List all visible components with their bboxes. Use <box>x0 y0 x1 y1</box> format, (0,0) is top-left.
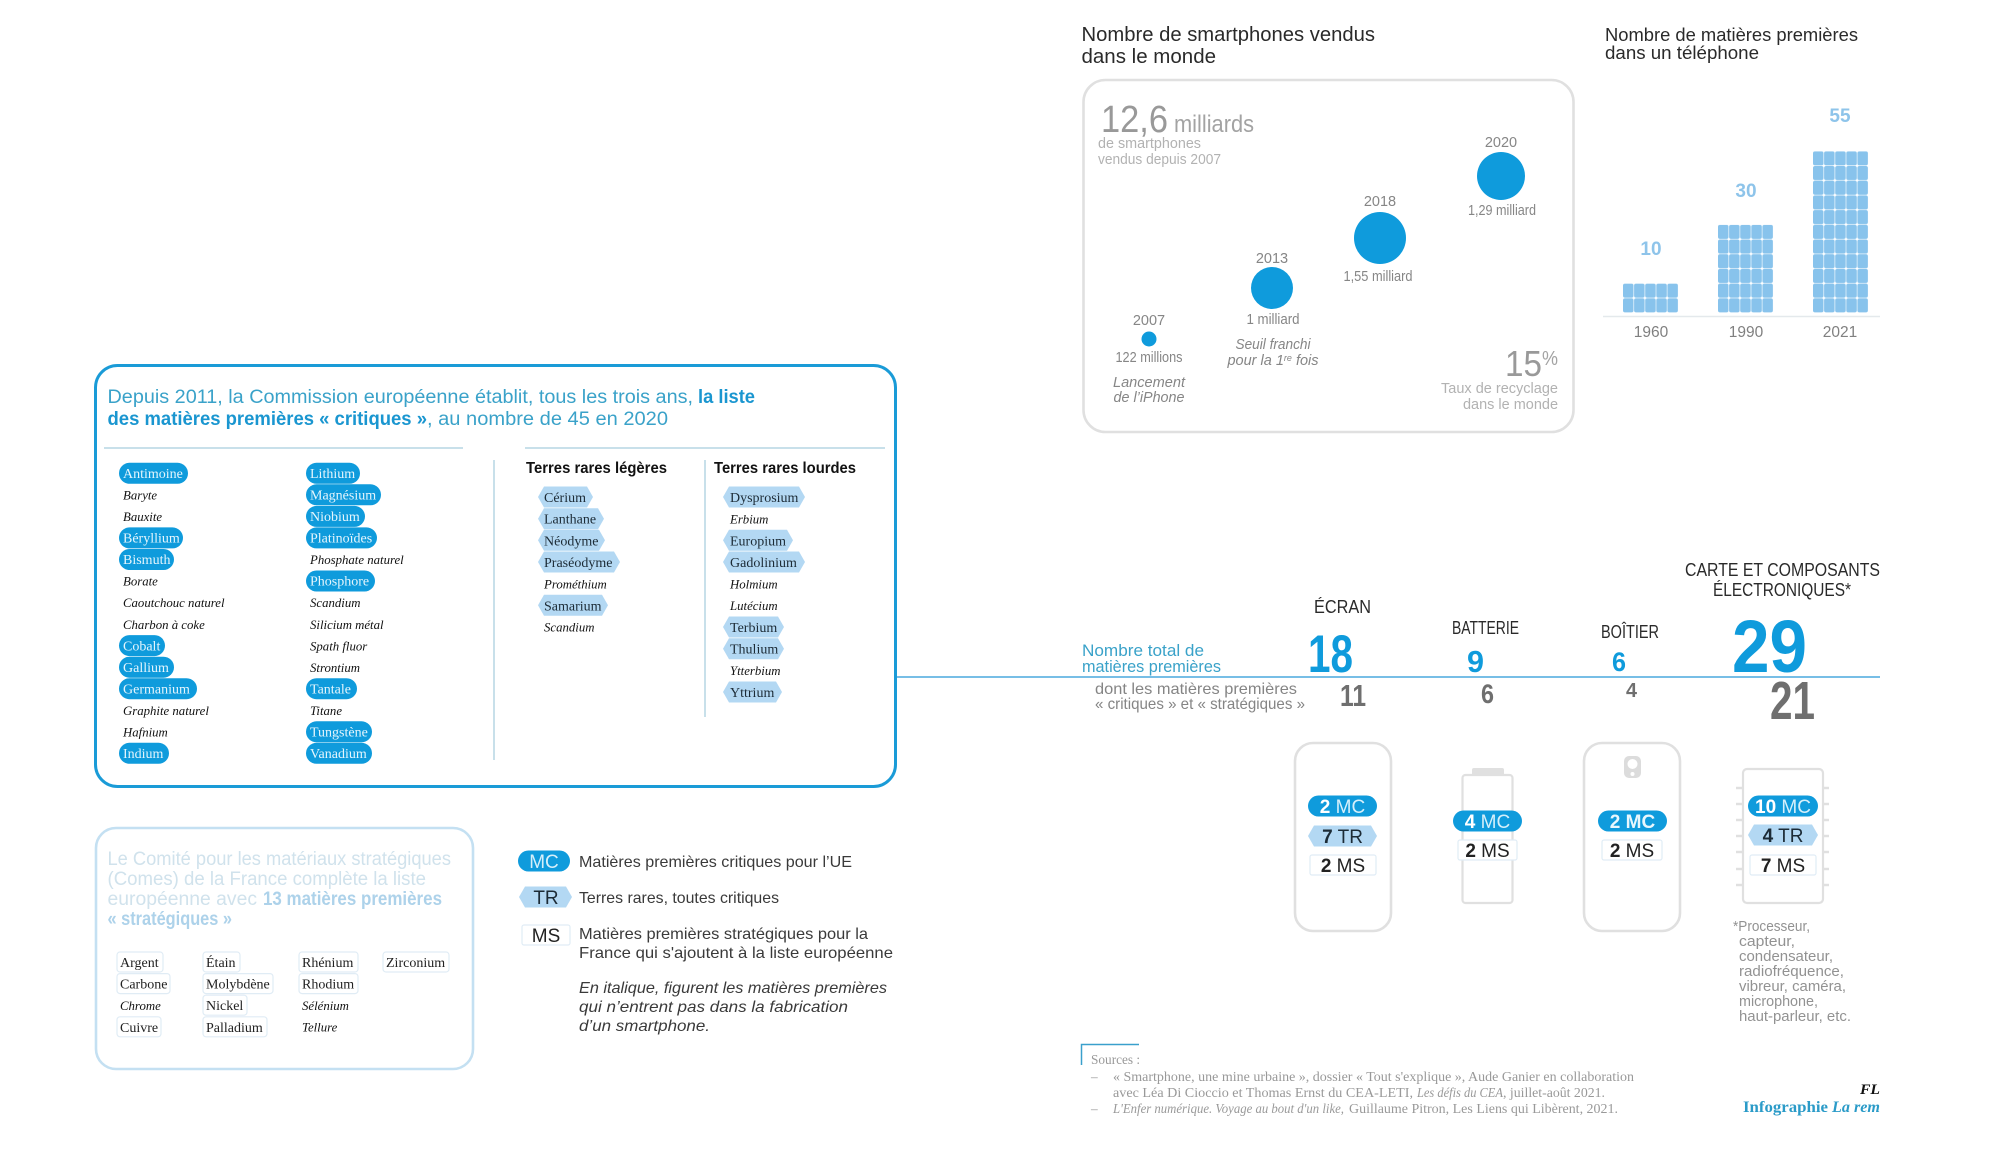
list: matières critiques, colonne 2: Scandium <box>310 596 360 610</box>
list: matières critiques, colonne 2: Silicium métal <box>310 618 384 632</box>
icon: dos de téléphone: 2 MS <box>1610 841 1654 862</box>
bubble: 2013: pour la 1 <box>1227 353 1284 369</box>
row label: dont critiques et stratégiques: dont les matières premières <box>1095 681 1297 698</box>
bubble: 2013: fois <box>1292 353 1319 369</box>
row label: nombre total de matières premières: Nombre total de <box>1082 641 1204 660</box>
stat: 12,6 milliards: 12,6 <box>1101 99 1168 141</box>
list: matières critiques, colonne 1: Gallium <box>123 661 169 676</box>
bubble: 2018: 1,55 milliard <box>1344 269 1412 285</box>
list: matières critiques, colonne 2: Phosphore <box>310 575 369 590</box>
panel: liste européenne des matières premières critiques <box>96 366 896 786</box>
bar: 2021: 55 <box>1829 106 1851 127</box>
list: matières critiques, colonne 1: Borate <box>123 575 158 589</box>
sources: Les défis du CEA <box>1416 1085 1504 1100</box>
list: terres rares lourdes: Lutécium <box>729 599 778 613</box>
bar: 1960: 10 <box>1640 239 1662 260</box>
legend item: MS <box>522 925 893 962</box>
heading: liste critique: Depuis 2011, la Commission européenne établit, tous les trois ans, <box>108 387 693 408</box>
list: matières stratégiques: Argent <box>120 956 159 971</box>
panel: smartphones vendus dans le monde <box>1084 80 1574 432</box>
column: écran: ÉCRAN <box>1314 597 1371 617</box>
bubble: 2013: Seuil franchi <box>1236 337 1311 353</box>
bubble: 2020: 1,29 milliard <box>1468 203 1536 219</box>
heading: liste critique: , au nombre de 45 en 2020 <box>427 409 668 430</box>
list: matières critiques, colonne 1: Caoutchouc naturel <box>123 596 225 610</box>
icon: puce électronique <box>1736 769 1829 903</box>
column: carte et composants électroniques: ÉLECTRONIQUES* <box>1713 580 1851 600</box>
legend item: TR <box>519 886 779 909</box>
bubble: 2007: 2007 <box>1133 313 1165 329</box>
heading: matières premières dans un téléphone <box>1605 25 1858 63</box>
list: matières critiques, colonne 1: Hafnium <box>122 726 168 740</box>
list: terres rares légères <box>526 460 667 635</box>
list: matières stratégiques: Cuivre <box>120 1021 158 1036</box>
icon: écran de téléphone <box>1295 743 1391 931</box>
list: matières critiques, colonne 2: Spath fluor <box>310 639 368 653</box>
text block: Comes <box>108 849 451 930</box>
column: batterie: BATTERIE <box>1452 618 1519 638</box>
list: matières critiques, colonne 1: Germanium <box>123 682 190 697</box>
stat: 12,6 milliards <box>1098 99 1254 168</box>
bubble: 2007: Lancement <box>1113 375 1186 391</box>
list: terres rares légères: Terres rares légères <box>526 460 667 477</box>
list: matières critiques, colonne 2: Titane <box>310 704 342 718</box>
list: matières critiques, colonne 2: Platinoïdes <box>310 532 372 547</box>
stat: 12,6 milliards: vendus depuis 2007 <box>1098 152 1221 168</box>
list: terres rares lourdes <box>714 460 856 702</box>
column: écran: 11 <box>1340 678 1366 713</box>
legend item: MS: France qui s'ajoutent à la liste européenne <box>579 945 893 962</box>
legend item: MS: Matières premières stratégiques pour la <box>579 926 868 943</box>
icon: puce électronique: 4 TR <box>1763 826 1803 847</box>
column: écran <box>1295 597 1391 931</box>
credit: FL <box>1859 1082 1880 1098</box>
list: matières critiques, colonne 2: Strontium <box>310 661 360 675</box>
heading: liste critique: des matières premières « critiques » <box>108 409 427 430</box>
footnote: composants: microphone, <box>1739 994 1818 1010</box>
credit <box>1743 1082 1880 1116</box>
column: batterie: 9 <box>1467 644 1484 679</box>
list: matières critiques, colonne 1: Antimoine <box>123 467 183 482</box>
bubble: 2007: de l’iPhone <box>1114 390 1184 406</box>
sources: – <box>1090 1101 1098 1116</box>
legend <box>518 850 893 1035</box>
list: matières critiques, colonne 1: Baryte <box>123 488 157 502</box>
text block: Comes: (Comes) de la France complète la liste <box>108 869 426 890</box>
row label: dont critiques et stratégiques <box>1095 681 1305 713</box>
bubble: 2007: 122 millions <box>1116 350 1182 366</box>
icon: puce électronique: 10 MC <box>1755 797 1811 818</box>
column: carte et composants électroniques: 29 <box>1732 605 1807 688</box>
icon: batterie: 2 MS <box>1465 841 1510 862</box>
text block: Comes: européenne avec <box>108 889 257 910</box>
column: boîtier: BOÎTIER <box>1601 622 1659 642</box>
list: matières critiques, colonne 2: Tantale <box>310 682 351 697</box>
list: terres rares lourdes: Erbium <box>729 512 768 526</box>
legend item: TR: Terres rares, toutes critiques <box>579 890 779 907</box>
list: matières critiques, colonne 2: Niobium <box>310 510 360 525</box>
list: matières stratégiques: Carbone <box>120 978 167 993</box>
footnote: composants: *Processeur, <box>1733 919 1810 935</box>
list: terres rares lourdes: Dysprosium <box>730 491 799 506</box>
sources: , juillet-août 2021. <box>1503 1085 1605 1100</box>
icon: écran de téléphone: 7 TR <box>1322 827 1363 848</box>
list: matières critiques, colonne 1: Indium <box>123 747 164 762</box>
text block: Comes: Le Comité pour les matériaux stratégiques <box>108 849 451 870</box>
note: italique: En italique, figurent les matières premières <box>579 980 887 997</box>
chart: matières premières par année <box>1603 106 1880 341</box>
list: matières critiques, colonne 2 <box>306 463 404 764</box>
list: matières critiques, colonne 1: Béryllium <box>123 532 180 547</box>
list: terres rares légères: Samarium <box>544 599 602 614</box>
list: terres rares lourdes: Holmium <box>729 577 778 591</box>
list: matières stratégiques: Palladium <box>206 1021 263 1036</box>
list: matières stratégiques: Rhodium <box>302 978 354 993</box>
bubble: 2007 <box>1113 313 1186 406</box>
list: matières critiques, colonne 1: Cobalt <box>123 639 160 654</box>
bar: 2021: 2021 <box>1823 324 1857 341</box>
stat: taux de recyclage 15% <box>1441 343 1558 413</box>
list: matières critiques, colonne 2: Lithium <box>310 467 355 482</box>
bar: 1960 <box>1623 239 1678 341</box>
stat: taux de recyclage 15%: 15 <box>1505 343 1542 384</box>
list: terres rares lourdes: Thulium <box>730 643 778 658</box>
list: terres rares lourdes: Europium <box>730 534 786 549</box>
heading: smartphones vendus: Nombre de smartphones vendus <box>1082 24 1375 46</box>
icon: écran de téléphone: 2 MC <box>1320 797 1365 818</box>
stat: 12,6 milliards: de smartphones <box>1098 136 1201 152</box>
column: boîtier: 6 <box>1612 647 1626 677</box>
stat: taux de recyclage 15%: % <box>1542 348 1558 370</box>
list: terres rares légères: Cérium <box>544 491 586 506</box>
column: carte et composants électroniques: 21 <box>1770 671 1815 731</box>
column: carte et composants électroniques: CARTE ET COMPOSANTS <box>1685 560 1880 580</box>
list: matières stratégiques: Zirconium <box>386 956 445 971</box>
text block: Comes: 13 matières premières <box>263 889 442 910</box>
list: matières critiques, colonne 1: Bauxite <box>123 510 162 524</box>
bubble: 2013: 2013 <box>1256 251 1288 267</box>
list: terres rares légères: Lanthane <box>544 513 596 528</box>
bubble: 2013: re <box>1284 353 1292 363</box>
bubble: 2018: 2018 <box>1364 194 1396 210</box>
note: italique <box>579 980 887 1035</box>
footnote: composants: vibreur, caméra, <box>1739 979 1846 995</box>
column: batterie <box>1452 618 1522 903</box>
stat: taux de recyclage 15%: Taux de recyclage <box>1441 381 1558 397</box>
sources <box>1082 1044 1634 1116</box>
bar: 1960: 1960 <box>1634 324 1669 341</box>
list: matières stratégiques: Sélénium <box>302 999 349 1013</box>
heading: matières premières dans un téléphone: Nombre de matières premières <box>1605 25 1858 45</box>
column: batterie: 6 <box>1481 679 1494 709</box>
sources: Guillaume Pitron, Les Liens qui Libèrent, 2021. <box>1349 1101 1618 1116</box>
column: carte et composants électroniques <box>1685 560 1880 1025</box>
icon: puce électronique: 7 MS <box>1761 856 1805 877</box>
column: écran: 18 <box>1308 625 1353 684</box>
list: matières critiques, colonne 2: Vanadium <box>310 747 367 762</box>
list: terres rares lourdes: Gadolinium <box>730 556 797 571</box>
list: matières stratégiques: Tellure <box>302 1021 338 1035</box>
heading: smartphones vendus: dans le monde <box>1082 46 1216 68</box>
stat: 12,6 milliards: milliards <box>1174 111 1254 138</box>
bar: 1990: 1990 <box>1729 324 1764 341</box>
sources: Sources : <box>1091 1052 1140 1067</box>
column: boîtier <box>1584 622 1680 931</box>
footnote: composants: condensateur, <box>1739 949 1833 965</box>
heading: matières premières dans un téléphone: dans un téléphone <box>1605 43 1759 63</box>
list: matières critiques, colonne 1: Charbon à coke <box>123 618 205 632</box>
list: matières stratégiques: Molybdène <box>206 978 270 993</box>
stat: taux de recyclage 15%: dans le monde <box>1463 397 1558 413</box>
legend item: TR: TR <box>533 888 559 909</box>
footnote: composants: capteur, <box>1739 934 1795 950</box>
bubble: 2020: 2020 <box>1485 135 1517 151</box>
list: terres rares légères: Praséodyme <box>544 556 612 571</box>
panel: matières premières stratégiques de la France <box>96 828 473 1069</box>
sources: L'Enfer numérique. Voyage au bout d'un like, <box>1112 1101 1344 1116</box>
list: terres rares légères: Prométhium <box>543 577 607 591</box>
heading: smartphones vendus <box>1082 24 1375 68</box>
list: terres rares lourdes: Ytterbium <box>730 664 780 678</box>
bar: 2021 <box>1813 106 1868 341</box>
list: matières critiques, colonne 2: Tungstène <box>310 726 368 740</box>
list: matières stratégiques: Chrome <box>120 999 161 1013</box>
list: matières critiques, colonne 2: Magnésium <box>310 488 376 504</box>
row label: dont critiques et stratégiques: « critiques » et « stratégiques » <box>1095 696 1305 713</box>
legend item: MC: Matières premières critiques pour l’UE <box>579 854 852 871</box>
list: matières critiques, colonne 2: Phosphate naturel <box>309 553 404 567</box>
footnote: composants: radiofréquence, <box>1739 964 1844 980</box>
icon: dos de téléphone <box>1584 743 1680 931</box>
text block: Comes: « stratégiques » <box>108 909 232 930</box>
bubble: 2013 <box>1226 251 1319 369</box>
row label: nombre total de matières premières <box>1082 641 1221 676</box>
list: matières stratégiques <box>117 952 449 1037</box>
credit: La rem <box>1831 1099 1880 1116</box>
list: terres rares légères: Néodyme <box>544 534 598 549</box>
bubble: 2020 <box>1468 135 1536 219</box>
icon: dos de téléphone: 2 MC <box>1610 812 1655 833</box>
row label: nombre total de matières premières: matières premières <box>1082 657 1221 676</box>
credit: Infographie <box>1743 1099 1828 1116</box>
list: terres rares légères: Scandium <box>544 621 594 635</box>
list: matières critiques, colonne 1: Bismuth <box>123 553 170 568</box>
heading: liste critique <box>108 387 755 430</box>
legend item: MS: MS <box>532 926 560 947</box>
list: terres rares lourdes: Yttrium <box>730 686 774 701</box>
footnote: composants <box>1733 919 1851 1025</box>
list: matières stratégiques: Étain <box>206 954 236 971</box>
heading: liste critique: la liste <box>698 387 755 408</box>
list: matières stratégiques: Nickel <box>206 999 243 1014</box>
list: terres rares lourdes: Terres rares lourdes <box>714 460 856 477</box>
list: matières critiques, colonne 1 <box>119 463 225 764</box>
list: matières critiques, colonne 1: Graphite naturel <box>123 704 209 718</box>
sources: « Smartphone, une mine urbaine », dossier « Tout s'explique », Aude Ganier en collaboration <box>1113 1069 1634 1084</box>
sources: avec Léa Di Cioccio et Thomas Ernst du CEA-LETI, <box>1113 1085 1413 1100</box>
list: matières stratégiques: Rhénium <box>302 956 353 971</box>
icon: batterie <box>1453 768 1522 903</box>
note: italique: d’un smartphone. <box>579 1018 710 1035</box>
bar: 1990 <box>1718 181 1774 341</box>
bubble: 2013: 1 milliard <box>1246 312 1300 328</box>
sources: – <box>1090 1069 1098 1084</box>
list: terres rares lourdes: Terbium <box>730 621 777 636</box>
legend item: MC <box>518 850 852 873</box>
footnote: composants: haut-parleur, etc. <box>1739 1009 1851 1025</box>
bubble: 2018 <box>1344 194 1412 285</box>
icon: batterie: 4 MC <box>1465 812 1510 833</box>
legend item: MC: MC <box>529 852 559 873</box>
column: boîtier: 4 <box>1626 680 1638 702</box>
note: italique: qui n’entrent pas dans la fabrication <box>579 999 848 1016</box>
icon: écran de téléphone: 2 MS <box>1321 856 1365 877</box>
bar: 1990: 30 <box>1735 181 1757 202</box>
